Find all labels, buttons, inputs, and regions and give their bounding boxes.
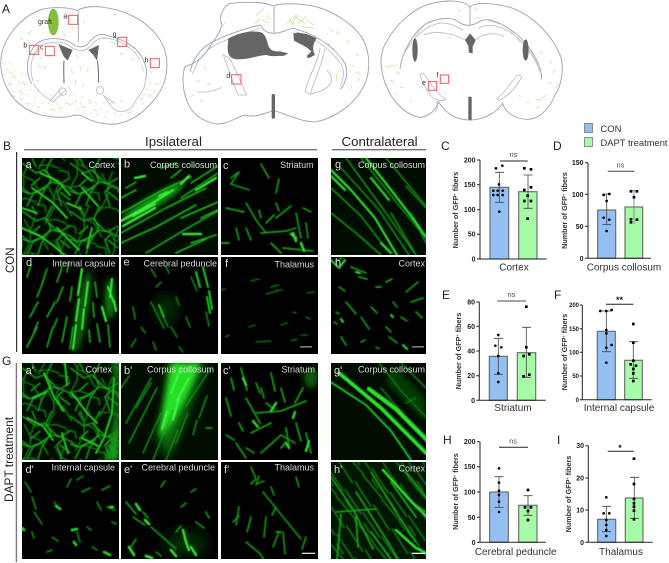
brain section 1 with graft: c <box>40 44 44 51</box>
section label G and DAPT treatment <box>2 354 17 562</box>
micrograph g Corpus collosum contralateral <box>328 155 429 258</box>
micrograph a' Cortex: Cortex <box>85 364 112 374</box>
micrograph c' Striatum: Striatum <box>281 364 315 374</box>
micrograph c Striatum: Striatum <box>280 160 314 170</box>
chart C Cortex: ns <box>510 152 518 159</box>
chart F Internal capsule: 100 <box>569 350 580 356</box>
chart C Cortex: + <box>452 193 457 196</box>
micrograph b' Corpus collosum: Corpus collosum <box>147 364 214 374</box>
micrograph d Internal capsule <box>19 254 122 357</box>
section label G and DAPT treatment: G <box>2 354 11 368</box>
chart F Internal capsule: ** <box>616 295 623 305</box>
chart D Corpus collosum: ns <box>617 162 625 170</box>
micrograph d Internal capsule: Internal capsule <box>52 258 116 268</box>
chart E Striatum: ns <box>508 292 516 299</box>
micrograph e' Cerebral peduncle: Cerebral peduncle <box>141 462 215 472</box>
chart D Corpus collosum: fibers <box>560 172 569 194</box>
micrograph g Corpus collosum contralateral: g <box>335 159 341 171</box>
micrograph d' Internal capsule <box>19 459 122 562</box>
brain section 2: d <box>226 73 230 80</box>
heading: Contralateral: Contralateral <box>342 134 418 149</box>
chart F Internal capsule: F <box>554 288 561 302</box>
chart H Cerebral peduncle: 0 <box>472 540 476 547</box>
micrograph f' Thalamus with scale bar: f' <box>224 464 229 476</box>
brain section 1 with graft: b <box>23 43 27 50</box>
chart D Corpus collosum: 100 <box>572 192 584 199</box>
micrograph f Thalamus with scale bar <box>218 254 321 357</box>
chart D Corpus collosum: Number of GFP <box>560 196 569 249</box>
brain section 1 with graft: h <box>145 58 149 65</box>
chart I Thalamus: 0 <box>580 540 584 547</box>
chart F Internal capsule: Number of GFP <box>560 338 569 390</box>
chart I Thalamus: 30 <box>576 443 584 450</box>
brain section 1 with graft: g <box>113 31 117 38</box>
micrograph b Corpus collosum: Corpus collosum <box>150 160 217 170</box>
chart I Thalamus: fibers <box>564 456 573 477</box>
chart E Striatum: E <box>442 288 450 302</box>
micrograph h Cortex contralateral with scale bar <box>328 254 429 357</box>
chart E Striatum <box>442 288 546 414</box>
chart C Cortex: Number of GFP <box>451 196 460 248</box>
micrograph h' Cortex contralateral with scale bar: h' <box>334 464 342 476</box>
graft <box>48 9 59 35</box>
chart C Cortex: 0 <box>472 256 476 264</box>
chart H Cerebral peduncle: Number of GFP <box>451 477 460 530</box>
chart H Cerebral peduncle: ns <box>509 438 517 446</box>
chart F Internal capsule: + <box>561 335 566 338</box>
micrograph d' Internal capsule: Internal capsule <box>51 462 115 472</box>
chart E Striatum: 0 <box>471 398 475 405</box>
micrograph g' Corpus collosum contralateral: g' <box>334 365 342 377</box>
panel A: brain section diagrams <box>0 1 562 125</box>
chart C Cortex: 200 <box>464 158 476 164</box>
brain section 1 with graft: graft <box>38 19 52 26</box>
micrograph c' Striatum: c' <box>223 365 231 377</box>
chart F Internal capsule: 200 <box>569 303 580 309</box>
chart C Cortex: fibers <box>451 172 460 193</box>
chart I Thalamus: Thalamus <box>599 547 643 558</box>
legend: CON <box>600 123 621 134</box>
micrograph c' Striatum <box>218 360 321 463</box>
brain section 3: e <box>422 80 426 87</box>
section label B and CON: CON <box>5 247 17 273</box>
chart H Cerebral peduncle: 50 <box>468 515 476 522</box>
chart H Cerebral peduncle: 200 <box>464 439 476 446</box>
chart F Internal capsule: 0 <box>576 398 580 404</box>
chart E Striatum: fibers <box>454 313 463 334</box>
micrograph h Cortex contralateral with scale bar: Cortex <box>398 259 425 269</box>
brain section 3 <box>381 1 562 120</box>
chart H Cerebral peduncle: H <box>443 433 452 447</box>
brain section 3: f <box>436 72 438 79</box>
micrograph h' Cortex contralateral with scale bar: Cortex <box>398 464 425 474</box>
micrograph a' Cortex <box>19 360 122 463</box>
chart D Corpus collosum: D <box>553 139 562 153</box>
chart H Cerebral peduncle: 100 <box>464 490 476 496</box>
chart C Cortex: C <box>441 139 450 153</box>
chart I Thalamus: Number of GFP <box>564 480 573 532</box>
chart F Internal capsule: Internal capsule <box>584 403 655 414</box>
chart H Cerebral peduncle: + <box>452 474 457 477</box>
chart C Cortex: 150 <box>464 182 476 189</box>
chart D Corpus collosum: + <box>561 193 566 196</box>
legend <box>584 123 668 148</box>
chart C Cortex: Cortex <box>499 263 529 274</box>
chart E Striatum: Striatum <box>494 403 532 414</box>
chart F Internal capsule: fibers <box>560 314 569 335</box>
section label B and CON: B <box>3 139 11 153</box>
chart D Corpus collosum: Corpus collosum <box>587 262 661 273</box>
micrograph c Striatum <box>218 155 321 258</box>
micrograph e Cerebral peduncle: e <box>124 256 130 268</box>
micrograph d' Internal capsule: d' <box>26 464 34 476</box>
region boxes e f <box>440 75 449 83</box>
micrograph b Corpus collosum: b <box>124 158 130 170</box>
section label B and CON <box>3 139 17 352</box>
chart C Cortex <box>441 139 547 274</box>
section label G and DAPT treatment: DAPT treatment <box>2 416 16 502</box>
micrograph f' Thalamus with scale bar <box>218 459 321 562</box>
heading: Ipsilateral: Ipsilateral <box>145 134 202 149</box>
chart E Striatum: Number of GFP <box>454 337 463 389</box>
micrograph g' Corpus collosum contralateral: Corpus collosum <box>358 364 425 374</box>
chart I Thalamus: + <box>565 477 570 480</box>
micrograph g' Corpus collosum contralateral <box>328 360 429 463</box>
micrograph b' Corpus collosum <box>118 360 221 463</box>
chart D Corpus collosum: 0 <box>580 256 584 263</box>
chart I Thalamus: * <box>618 443 622 453</box>
chart E Striatum: 60 <box>467 324 475 331</box>
chart D Corpus collosum: 150 <box>572 160 584 167</box>
brain section 1 with graft: a <box>63 13 67 20</box>
chart D Corpus collosum: 50 <box>576 224 584 231</box>
micrograph e' Cerebral peduncle: e' <box>124 464 132 476</box>
micrograph d Internal capsule: d <box>26 257 32 269</box>
label A: A <box>2 2 10 16</box>
micrograph f' Thalamus with scale bar: Thalamus <box>274 462 314 472</box>
chart H Cerebral peduncle: 150 <box>464 464 476 471</box>
region box d <box>232 75 241 84</box>
micrograph h Cortex contralateral with scale bar: h <box>335 257 341 269</box>
chart H Cerebral peduncle: fibers <box>451 453 460 475</box>
chart E Striatum: 40 <box>467 348 475 356</box>
chart E Striatum: 80 <box>467 300 475 306</box>
micrograph f Thalamus with scale bar: Thalamus <box>274 260 314 270</box>
micrograph g Corpus collosum contralateral: Corpus collosum <box>358 160 425 170</box>
chart I Thalamus: I <box>557 433 560 447</box>
micrograph c Striatum: c <box>223 160 229 172</box>
brain section 1 with graft <box>0 7 167 125</box>
micrograph e Cerebral peduncle <box>118 254 221 357</box>
micrograph a Cortex: Cortex <box>88 160 115 170</box>
region boxes a b c g h <box>69 15 78 24</box>
micrograph e' Cerebral peduncle <box>118 459 221 562</box>
chart E Striatum: 20 <box>467 373 475 380</box>
chart F Internal capsule: 150 <box>569 327 580 333</box>
micrograph b Corpus collosum <box>118 155 221 258</box>
chart E Striatum: + <box>455 334 460 337</box>
legend: DAPT treatment <box>600 137 668 148</box>
chart C Cortex: 100 <box>464 207 476 214</box>
chart H Cerebral peduncle: Cerebral peduncle <box>475 547 557 558</box>
micrograph a' Cortex: a' <box>26 365 34 377</box>
chart H Cerebral peduncle <box>443 433 557 558</box>
chart F Internal capsule: 50 <box>572 374 580 380</box>
chart D Corpus collosum <box>553 139 661 273</box>
chart I Thalamus: 20 <box>576 476 584 482</box>
micrograph a Cortex <box>19 155 122 258</box>
micrograph a Cortex: a <box>26 159 32 171</box>
brain section 2 <box>183 2 369 124</box>
micrograph e Cerebral peduncle: Cerebral peduncle <box>143 258 217 268</box>
chart I Thalamus <box>557 433 653 558</box>
micrograph h' Cortex contralateral with scale bar <box>328 459 429 562</box>
chart F Internal capsule <box>554 288 655 414</box>
chart C Cortex: 50 <box>468 232 476 238</box>
chart I Thalamus: 10 <box>576 508 584 514</box>
micrograph b' Corpus collosum: b' <box>124 365 132 377</box>
micrograph f Thalamus with scale bar: f <box>225 258 229 270</box>
